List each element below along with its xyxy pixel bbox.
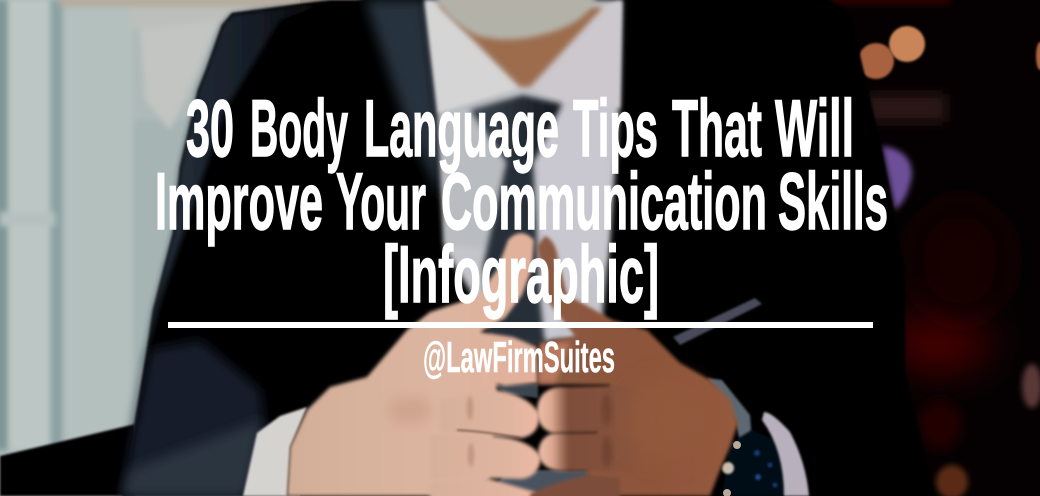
watch and right cuff: [707, 378, 809, 496]
title: That: [672, 84, 762, 174]
necktie: [470, 95, 562, 345]
right hand finger three: [538, 432, 640, 472]
left hand: [287, 233, 538, 496]
right hand: [537, 236, 738, 496]
divider line: [168, 322, 873, 328]
left hand finger four: [430, 478, 537, 496]
title: [155, 84, 888, 320]
title: Will: [775, 84, 854, 174]
title: [Infographic]: [383, 230, 659, 320]
small gaps behind fingers: [493, 384, 590, 496]
right hand finger two: [537, 385, 640, 433]
title: Tips: [573, 84, 658, 174]
title: 30: [186, 84, 234, 174]
background: dark red bokeh lights at right: [830, 0, 1040, 496]
left hand finger three: [430, 434, 541, 480]
title: Language: [364, 84, 559, 174]
title: Your: [336, 157, 426, 247]
beard: [433, 0, 597, 40]
hands: [287, 233, 738, 496]
title: Body: [250, 84, 348, 174]
handle: @LawFirmSuites: [423, 333, 615, 382]
white shirt and collar: [425, 0, 622, 345]
title: Communication: [441, 157, 767, 247]
shirt cuff left: [243, 407, 307, 496]
pocket square: [673, 298, 762, 345]
title: Improve: [155, 157, 323, 247]
right hand index fingertip: [538, 342, 570, 383]
suit jacket: [122, 0, 935, 496]
title: Skills: [778, 157, 888, 247]
neck: [437, 3, 603, 87]
left hand finger two: [440, 389, 539, 438]
knuckle shading: [388, 396, 432, 424]
right hand finger four: [530, 475, 620, 496]
